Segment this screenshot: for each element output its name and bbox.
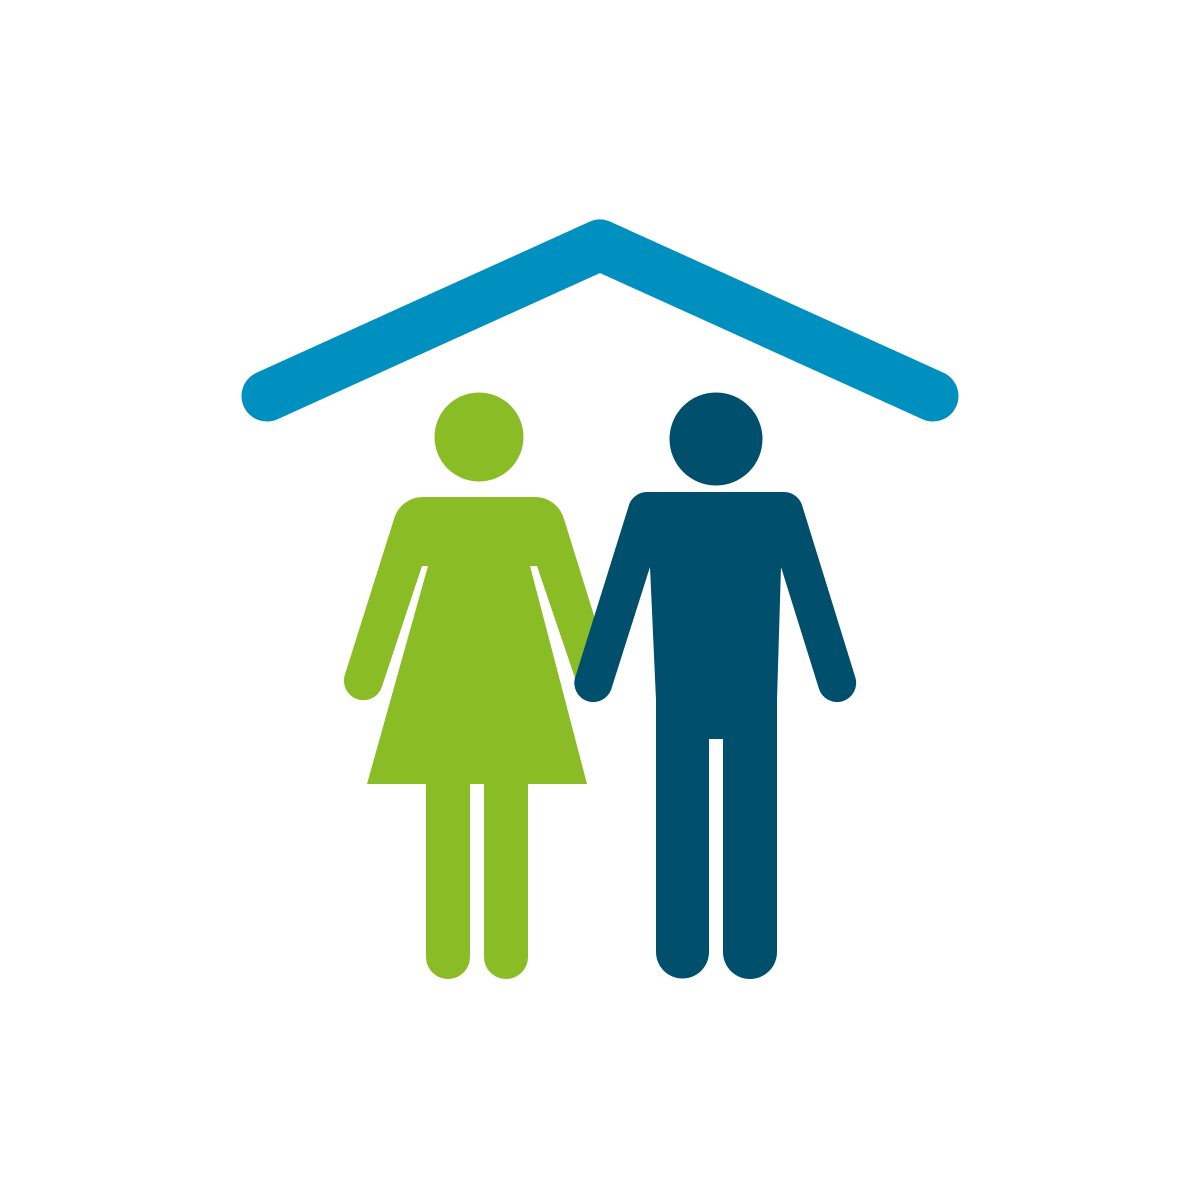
icon: man [574,392,856,979]
icon: woman [344,392,596,979]
icon: roof [267,245,933,396]
